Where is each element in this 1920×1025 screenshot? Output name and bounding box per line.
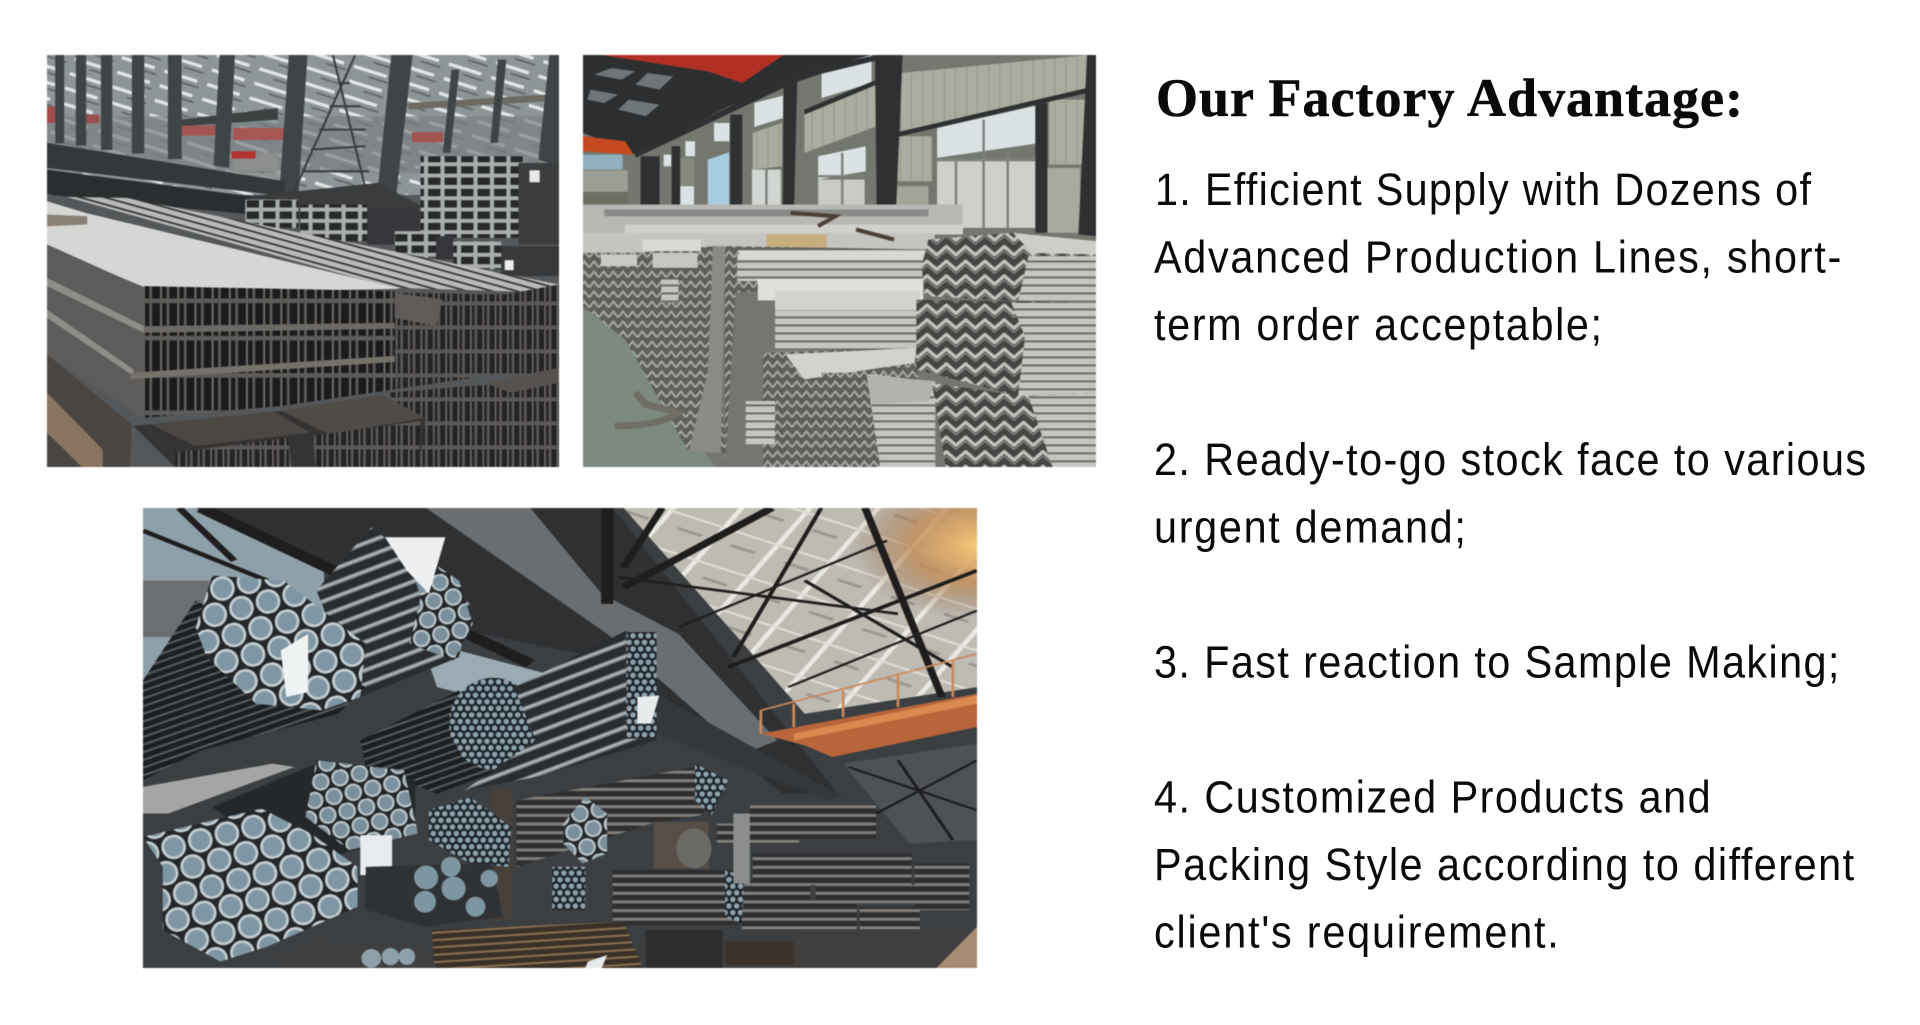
truss beams bbox=[143, 508, 977, 697]
small cluster bbox=[429, 797, 511, 867]
advantage 2: 2. Ready-to-go stock face to various bbox=[1154, 435, 1866, 485]
white sleeve bbox=[385, 537, 445, 594]
paper tag bbox=[360, 835, 392, 875]
wall panels bbox=[680, 55, 1089, 233]
ceiling bbox=[196, 508, 977, 794]
advantage 4: client's requirement. bbox=[1154, 908, 1559, 958]
white beam tops bbox=[47, 201, 400, 291]
text panel: factory advantage bbox=[1154, 68, 1866, 958]
right beam ends bbox=[388, 284, 559, 467]
lifting straps bbox=[615, 393, 678, 426]
advantage 2: urgent demand; bbox=[1154, 503, 1466, 553]
upper tube bundle bbox=[316, 527, 470, 697]
advantage 4: 4. Customized Products and bbox=[1154, 773, 1711, 823]
back stack of beams bbox=[245, 156, 559, 276]
left tube bundle bbox=[143, 601, 366, 780]
white tag bbox=[281, 634, 308, 697]
advantage 1 bbox=[1154, 165, 1841, 350]
floor bbox=[583, 309, 715, 467]
lower beam stack bbox=[134, 394, 426, 467]
upper bundle circle ends bbox=[404, 544, 473, 660]
right stack of zigzag angle steel bbox=[916, 233, 1096, 467]
steel rail girder bbox=[657, 694, 843, 800]
tag bbox=[637, 695, 659, 724]
back rows of steel bbox=[583, 205, 963, 253]
cluster end bbox=[563, 797, 607, 863]
photo: stacked H-beams in factory bbox=[46, 54, 560, 468]
beam side faces bbox=[47, 246, 146, 467]
bottom rods bbox=[272, 922, 722, 968]
photo: bundles of round steel bars in warehouse bbox=[142, 507, 978, 969]
advantage 1: 1. Efficient Supply with Dozens of bbox=[1155, 165, 1812, 215]
window mullions bbox=[766, 120, 1039, 228]
heading: Our Factory Advantage: bbox=[1156, 68, 1743, 128]
tubes lower centre bbox=[366, 857, 503, 927]
wall bbox=[143, 508, 547, 707]
left bundle circle ends bbox=[196, 576, 366, 710]
lower right stacks bbox=[552, 805, 977, 968]
ceiling with red crane bbox=[583, 55, 873, 209]
advantage 1: term order acceptable; bbox=[1154, 300, 1602, 350]
diagonal tube bundle bbox=[465, 630, 657, 790]
post bbox=[491, 790, 513, 920]
grey side slab bbox=[143, 764, 294, 814]
tiny bars end bbox=[449, 678, 537, 770]
front stack of steel bbox=[822, 373, 935, 467]
medium cluster bbox=[305, 760, 418, 850]
middle tube bundle bbox=[360, 690, 508, 794]
dark columns bbox=[635, 55, 1096, 236]
main beam ends bbox=[130, 286, 402, 418]
photo: stacked angle steel in workshop bbox=[582, 54, 1097, 468]
advantage 4 bbox=[1154, 773, 1854, 958]
advantage 2 bbox=[1154, 435, 1866, 553]
ladder bbox=[293, 55, 369, 203]
orange crane bbox=[761, 654, 977, 757]
ceiling bbox=[47, 55, 559, 195]
tube behind cluster bbox=[212, 764, 415, 867]
large bottom-left cluster bbox=[143, 809, 358, 962]
left rows of steel bbox=[583, 240, 725, 453]
dark back beams bbox=[47, 143, 422, 240]
mid-right tubes bbox=[517, 767, 728, 867]
advantage 3: 3. Fast reaction to Sample Making; bbox=[1154, 638, 1839, 688]
steel columns bbox=[55, 55, 559, 208]
advantage 1: Advanced Production Lines, short- bbox=[1154, 233, 1841, 283]
windows bbox=[664, 55, 1040, 228]
advantage 4: Packing Style according to different bbox=[1154, 840, 1854, 890]
striped beam tops bbox=[67, 197, 559, 293]
centre rows of steel bbox=[725, 246, 928, 467]
far truss bbox=[843, 744, 977, 844]
